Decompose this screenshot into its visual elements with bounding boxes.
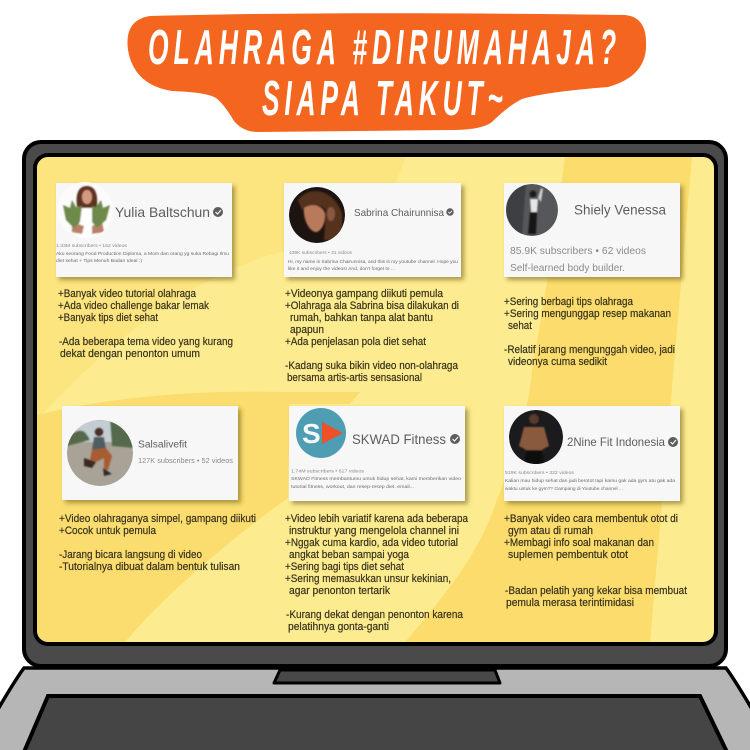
channel stats: 519K subscribers • 322 videos bbox=[505, 470, 575, 475]
text: SKWAD pros and cons: +Video lebih variatif karena ada beberapa bbox=[285, 513, 469, 525]
text: Sabrina pros and cons: +Olahraga ala Sabrina bisa dilakukan di bbox=[285, 300, 459, 312]
text: SKWAD pros and cons: +Nggak cuma kardio, ada video tutorial bbox=[285, 537, 458, 549]
channel stats: 439K subscribers • 31 videos bbox=[289, 250, 353, 255]
icon: avatar Yulia bbox=[62, 182, 110, 234]
channel stats: 85.9K subscribers • 62 videos bbox=[510, 245, 646, 257]
banner shape bbox=[127, 13, 646, 132]
text: Sabrina pros and cons bbox=[285, 288, 459, 384]
channel description: waktu untuk ke gym?? Gampang di Youtube channel ... bbox=[505, 486, 623, 491]
title line 1: OLAHRAGA #DIRUMAHAJA? bbox=[148, 20, 616, 75]
channel description bbox=[505, 478, 675, 491]
channel description bbox=[56, 251, 229, 263]
channel description: like it and enjoy the videos! And, don't forget to ... bbox=[288, 266, 395, 271]
verified badge bbox=[446, 208, 454, 216]
text: Shiely pros and cons: +Sering mengunggap resep makanan bbox=[504, 308, 671, 320]
channel description: Hi, my name is Sabrina Chairunnisa, and this is my youtube channel. Hope you bbox=[288, 259, 458, 264]
text: Shiely pros and cons: sehat bbox=[508, 320, 532, 332]
channel description: diet sehat + Tips Menuh Badan Ideal :) bbox=[56, 258, 142, 263]
base body bbox=[0, 668, 750, 750]
text: 2Nine pros and cons: suplemen pembentuk otot bbox=[508, 549, 628, 561]
channel description: Self-learned body builder. bbox=[510, 262, 625, 274]
text: Salsa pros and cons bbox=[59, 513, 256, 573]
card: Shiely Venessa bbox=[504, 183, 680, 277]
channel description: Kalian mau hidup sehat dan jadi berotot tapi kamu gak ada gym atu gak ada bbox=[505, 478, 675, 483]
channel description: SKWAD Fitness membantumu untuk hidup sehat, kami memberikan video bbox=[291, 476, 461, 481]
verified badge bbox=[668, 437, 678, 447]
channel description: tutorial fitness, workout, dan resep-resep diet. email... bbox=[291, 484, 414, 489]
text: Sabrina pros and cons: bersama artis-artis sensasional bbox=[287, 372, 422, 384]
icon: avatar SKWAD bbox=[296, 408, 346, 458]
text: Shiely pros and cons: videonya cuma sedikit bbox=[508, 356, 607, 368]
text: Yulia pros and cons: +Ada video challenge bakar lemak bbox=[58, 300, 209, 312]
verified badge bbox=[213, 207, 223, 217]
text: Shiely pros and cons: -Relatif jarang mengunggah video, jadi bbox=[504, 344, 675, 356]
text: SKWAD pros and cons: agar penonton tertarik bbox=[289, 585, 390, 597]
text: Salsa pros and cons: -Jarang bicara langsung di video bbox=[59, 549, 202, 561]
text: Yulia pros and cons: dekat dengan penonton umum bbox=[60, 348, 200, 360]
text: Salsa pros and cons: -Tutorialnya dibuat dalam bentuk tulisan bbox=[59, 561, 240, 573]
text: Sabrina pros and cons: -Kadang suka bikin video non-olahraga bbox=[285, 360, 459, 372]
icon: avatar Sabrina bbox=[289, 187, 345, 243]
channel name: Yulia Baltschun bbox=[115, 204, 210, 220]
verified badge bbox=[450, 434, 460, 444]
card: Yulia Baltschun bbox=[56, 182, 232, 277]
card: 2Nine Fit Indonesia bbox=[504, 406, 680, 501]
keyboard bbox=[24, 696, 727, 750]
icon: avatar Salsa bbox=[67, 420, 134, 486]
card: Sabrina Chairunnisa bbox=[284, 183, 461, 277]
text: SKWAD pros and cons: angkat beban sampai yoga bbox=[289, 549, 410, 561]
channel name: SKWAD Fitness bbox=[352, 431, 446, 447]
title banner bbox=[127, 13, 646, 132]
hinge bbox=[274, 670, 500, 683]
text: Sabrina pros and cons: rumah, bahkan tanpa alat bantu bbox=[290, 312, 433, 324]
background swashes bbox=[37, 157, 692, 642]
text: Yulia pros and cons: +Banyak tips diet sehat bbox=[58, 312, 158, 324]
channel name: Salsalivefit bbox=[138, 440, 187, 451]
laptop screen bbox=[35, 155, 716, 644]
text: Sabrina pros and cons: apapun bbox=[290, 324, 324, 336]
text: Yulia pros and cons: -Ada beberapa tema video yang kurang bbox=[59, 336, 233, 348]
text: SKWAD pros and cons: +Sering memasukkan unsur kekinian, bbox=[285, 573, 451, 585]
laptop base bbox=[0, 668, 750, 750]
channel description bbox=[291, 476, 461, 489]
card: Salsalivefit bbox=[62, 406, 238, 500]
channel stats: 1.33M subscribers • 162 videos bbox=[56, 243, 128, 248]
channel name: 2Nine Fit Indonesia bbox=[567, 435, 665, 449]
icon: avatar SKWAD: S bbox=[302, 418, 321, 449]
title line 2: SIAPA TAKUT~ bbox=[262, 71, 503, 126]
text: Yulia pros and cons bbox=[58, 288, 233, 360]
channel name: Sabrina Chairunnisa bbox=[354, 207, 444, 219]
text: SKWAD pros and cons bbox=[285, 513, 469, 633]
text: 2Nine pros and cons: +Banyak video cara membentuk otot di bbox=[504, 513, 678, 525]
text: 2Nine pros and cons bbox=[504, 513, 687, 609]
text: Yulia pros and cons: +Banyak video tutorial olahraga bbox=[58, 288, 197, 300]
channel stats: 1.74M subscribers • 617 videos bbox=[291, 468, 365, 474]
icon: avatar 2Nine bbox=[509, 410, 563, 466]
text: Salsa pros and cons: +Video olahraganya simpel, gampang diikuti bbox=[59, 513, 256, 525]
channel description: Aku seorang Food Production Diploma, a Mom dan orang yg suka Rebagi Ilmu bbox=[56, 251, 229, 256]
text: 2Nine pros and cons: -Badan pelatih yang kekar bisa membuat bbox=[505, 585, 687, 597]
text: SKWAD pros and cons: instruktur yang mengelola channel ini bbox=[289, 525, 459, 537]
text: Shiely pros and cons: +Sering berbagi tips olahraga bbox=[504, 296, 634, 308]
text: SKWAD pros and cons: -Kurang dekat dengan penonton karena bbox=[286, 609, 464, 621]
text: 2Nine pros and cons: gym atau di rumah bbox=[508, 525, 593, 537]
laptop lid bbox=[24, 142, 726, 666]
card: SKWAD Fitness bbox=[289, 406, 465, 501]
text: SKWAD pros and cons: +Sering bagi tips diet sehat bbox=[285, 561, 404, 573]
text: Sabrina pros and cons: +Ada penjelasan pola diet sehat bbox=[285, 336, 426, 348]
channel stats: 127K subscribers • 52 videos bbox=[138, 456, 233, 465]
text: Shiely pros and cons bbox=[504, 296, 675, 368]
channel name: Shiely Venessa bbox=[574, 202, 666, 218]
text: 2Nine pros and cons: +Membagi info soal makanan dan bbox=[504, 537, 654, 549]
text: Salsa pros and cons: +Cocok untuk pemula bbox=[59, 525, 157, 537]
text: 2Nine pros and cons: pemula merasa terintimidasi bbox=[506, 597, 634, 609]
icon: avatar Shiely bbox=[506, 184, 558, 236]
screen background bbox=[35, 155, 716, 644]
text: Sabrina pros and cons: +Videonya gampang diikuti pemula bbox=[285, 288, 444, 300]
text: SKWAD pros and cons: pelatihnya gonta-ganti bbox=[288, 621, 389, 633]
channel description bbox=[288, 259, 458, 271]
